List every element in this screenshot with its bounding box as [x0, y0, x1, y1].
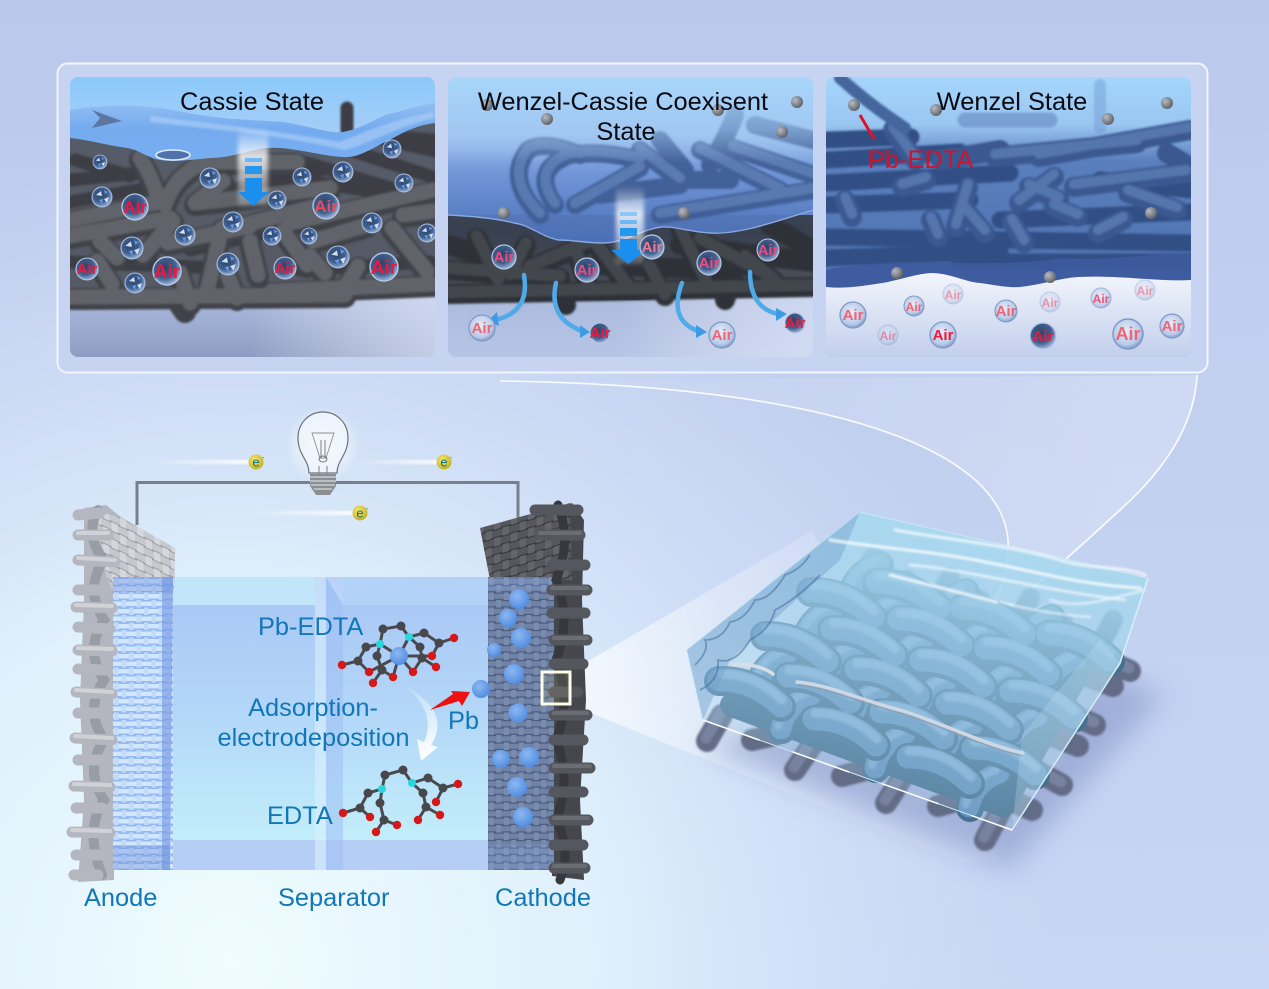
heading: Wenzel-Cassie Coexisent State: State — [596, 118, 656, 146]
air bubbles: Wenzel: Air — [996, 303, 1017, 320]
zoom fan connecting cloth to states panel — [500, 375, 1197, 640]
air bubbles: Wenzel: Air — [843, 307, 864, 324]
air bubbles and escape arrows: Air — [758, 242, 779, 259]
air bubbles: Wenzel: Air — [933, 327, 954, 344]
fibers: dry lower mesh — [450, 225, 813, 305]
Pb-EDTA molecule — [338, 622, 458, 687]
air bubbles: Cassie: Air — [275, 260, 296, 277]
deposited Pb spheres — [487, 589, 539, 827]
electrons: e — [356, 506, 364, 520]
fibers: Cassie mesh — [70, 108, 440, 312]
fibers: wetted upper mesh — [519, 115, 813, 215]
labels: battery text: Adsorption- — [248, 694, 378, 722]
air bubbles and escape arrows: Air — [494, 249, 515, 266]
air bubbles and escape arrows: Air — [577, 262, 598, 279]
cloth shadow — [700, 650, 1165, 870]
water layer: Cassie — [70, 103, 435, 161]
electrons: e — [440, 454, 448, 470]
air bubbles: Wenzel: Air — [1137, 284, 1154, 298]
heading: Wenzel State: Wenzel State — [937, 88, 1087, 116]
icon: infiltration arrow — [611, 186, 646, 264]
electrons: - — [262, 455, 265, 462]
label: Pb-EDTA with pointer — [860, 115, 973, 174]
icon: electron trails — [150, 460, 439, 515]
air bubbles and escape arrows: Air — [712, 327, 733, 344]
free Pb sphere — [472, 680, 490, 698]
gray Pb-EDTA balls: Wenzel — [848, 97, 1173, 283]
panel: Cassie State — [70, 77, 440, 357]
air bubbles and escape arrows: Air — [785, 315, 806, 332]
panel: Wenzel State — [826, 77, 1191, 357]
electrons: - — [450, 455, 453, 462]
haze over upper mesh — [514, 105, 813, 158]
separator — [315, 577, 343, 870]
air bubbles: Cassie: Air — [314, 197, 338, 216]
air bubbles: Wenzel: Air — [945, 288, 962, 302]
icon: light bulb — [285, 407, 361, 495]
labels: battery text: Pb — [448, 707, 479, 735]
air bubbles: Cassie: Air — [123, 198, 147, 217]
EDTA molecule — [339, 766, 462, 836]
labels: battery text: EDTA — [267, 802, 333, 830]
arrow: red Pb release — [430, 691, 470, 710]
heading: Cassie State: Cassie State — [180, 88, 324, 116]
selection square on cathode — [542, 672, 570, 704]
labels: battery text: Cathode — [495, 884, 591, 912]
anode electrode — [72, 505, 175, 882]
water edge: Wenzel — [826, 254, 1191, 288]
labels: battery text: Pb-EDTA — [258, 613, 363, 641]
cloth stubs — [706, 557, 1130, 840]
woven strands — [719, 561, 1111, 808]
gray Pb-EDTA balls: coexisting — [481, 96, 803, 219]
panel: Wenzel-Cassie Coexisent State — [448, 77, 813, 357]
air bubbles: Cassie: Air — [77, 261, 98, 278]
electrons: - — [366, 506, 369, 513]
lower clear zone — [826, 273, 1191, 357]
electrons — [248, 454, 453, 520]
air bubbles and escape arrows: Air — [699, 255, 720, 272]
label: Pb-EDTA with pointer: Pb-EDTA — [868, 146, 973, 174]
air bubbles: Cassie: Air — [371, 258, 398, 279]
labels: battery text: electrodeposition — [218, 724, 409, 752]
fibers: fully wetted mesh — [826, 78, 1191, 262]
light beam from cathode square to cloth — [571, 531, 1000, 862]
air bubbles: Wenzel: Air — [1115, 324, 1141, 344]
labels: battery text: Anode — [84, 884, 157, 912]
external circuit wire — [137, 482, 518, 525]
water layer: coexisting — [448, 168, 813, 244]
air bubbles: Cassie — [76, 140, 436, 293]
air bubbles and escape arrows: Air — [642, 239, 663, 256]
water block — [687, 512, 1148, 830]
air bubbles and escape arrows: Air — [472, 320, 493, 337]
illustration: water-covered woven cloth — [687, 512, 1165, 870]
air bubbles: Wenzel: Air — [1093, 292, 1110, 306]
cloth underlay — [732, 578, 1092, 805]
air bubbles: Cassie: Air — [154, 262, 181, 283]
labels: battery text: Separator — [278, 884, 390, 912]
air bubbles: Wenzel: Air — [880, 329, 897, 343]
labels: battery text — [84, 613, 591, 912]
icon: infiltration arrow — [238, 128, 269, 206]
arrow: white decomposition arrow — [405, 686, 438, 761]
heading: Wenzel-Cassie Coexisent State: Wenzel-Cassie Coexisent — [478, 88, 768, 116]
air bubbles: Wenzel: Air — [1033, 328, 1054, 345]
electrons: e — [252, 454, 260, 470]
air bubbles: Wenzel: Air — [906, 300, 923, 314]
heading: Wenzel-Cassie Coexisent State — [478, 92, 768, 140]
air bubbles: Wenzel — [840, 280, 1184, 349]
air bubbles and escape arrows: Air — [590, 325, 611, 342]
electrolytic tank — [112, 577, 550, 870]
panel: wetting states frame — [58, 64, 1208, 372]
air bubbles: Wenzel: Air — [1042, 296, 1059, 310]
cathode electrode — [480, 503, 590, 880]
air bubbles: Wenzel: Air — [1162, 318, 1183, 335]
air bubbles and escape arrows — [469, 235, 806, 348]
